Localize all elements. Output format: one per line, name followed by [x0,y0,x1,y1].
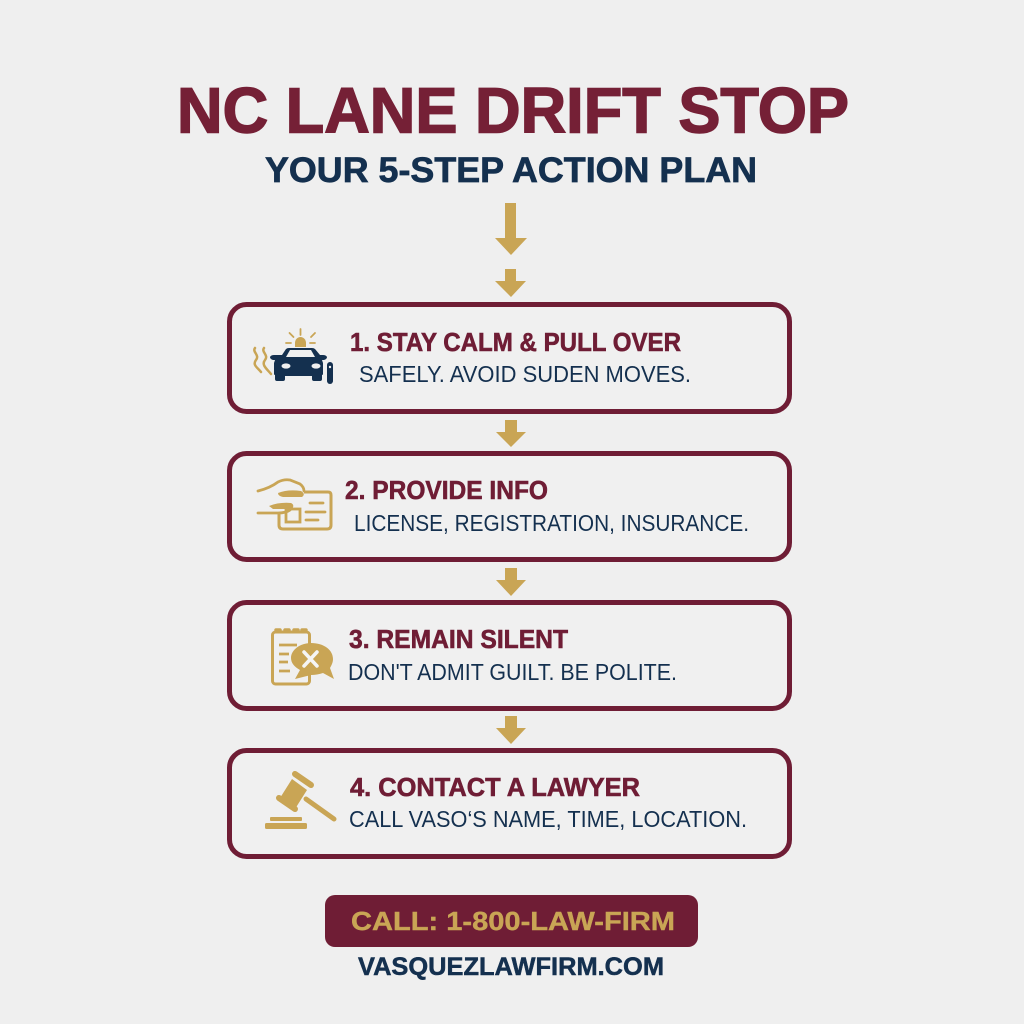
step 1 description: SAFELY. AVOID SUDEN MOVES. [359,361,691,387]
step 4 heading: 4. CONTACT A LAWYER [350,774,640,802]
icon: gavel [265,774,334,829]
call button [325,895,698,947]
arrow: step 2 to 3 [496,568,526,596]
arrow: long top arrow [495,203,527,255]
step 1 heading: 1. STAY CALM & PULL OVER [350,329,681,357]
panel: step 4 [230,750,790,856]
arrow: step 1 to 2 [496,420,526,447]
panel: step 1 [230,304,790,412]
arrow: short top arrow [495,269,526,297]
call button: CALL: 1-800-LAW-FIRM [351,906,675,936]
step 3 description: DON'T ADMIT GUILT. BE POLITE. [348,659,677,685]
panel: step 2 [230,454,790,560]
subtitle: YOUR 5-STEP ACTION PLAN [265,151,757,190]
step 2 description: LICENSE, REGISTRATION, INSURANCE. [354,510,749,536]
panel: step 3 [230,602,790,708]
website: VASQUEZLAWFIRM.COM [358,953,664,981]
step 2 heading: 2. PROVIDE INFO [345,477,548,505]
step 4 description: CALL VASO‘S NAME, TIME, LOCATION. [349,806,747,832]
icon: hand with license card [258,480,331,529]
arrow: step 3 to 4 [496,716,526,744]
icon: notepad with speech bubble [272,630,334,684]
icon: police car [254,329,333,384]
title: NC LANE DRIFT STOP [177,74,849,146]
step 3 heading: 3. REMAIN SILENT [349,626,568,654]
